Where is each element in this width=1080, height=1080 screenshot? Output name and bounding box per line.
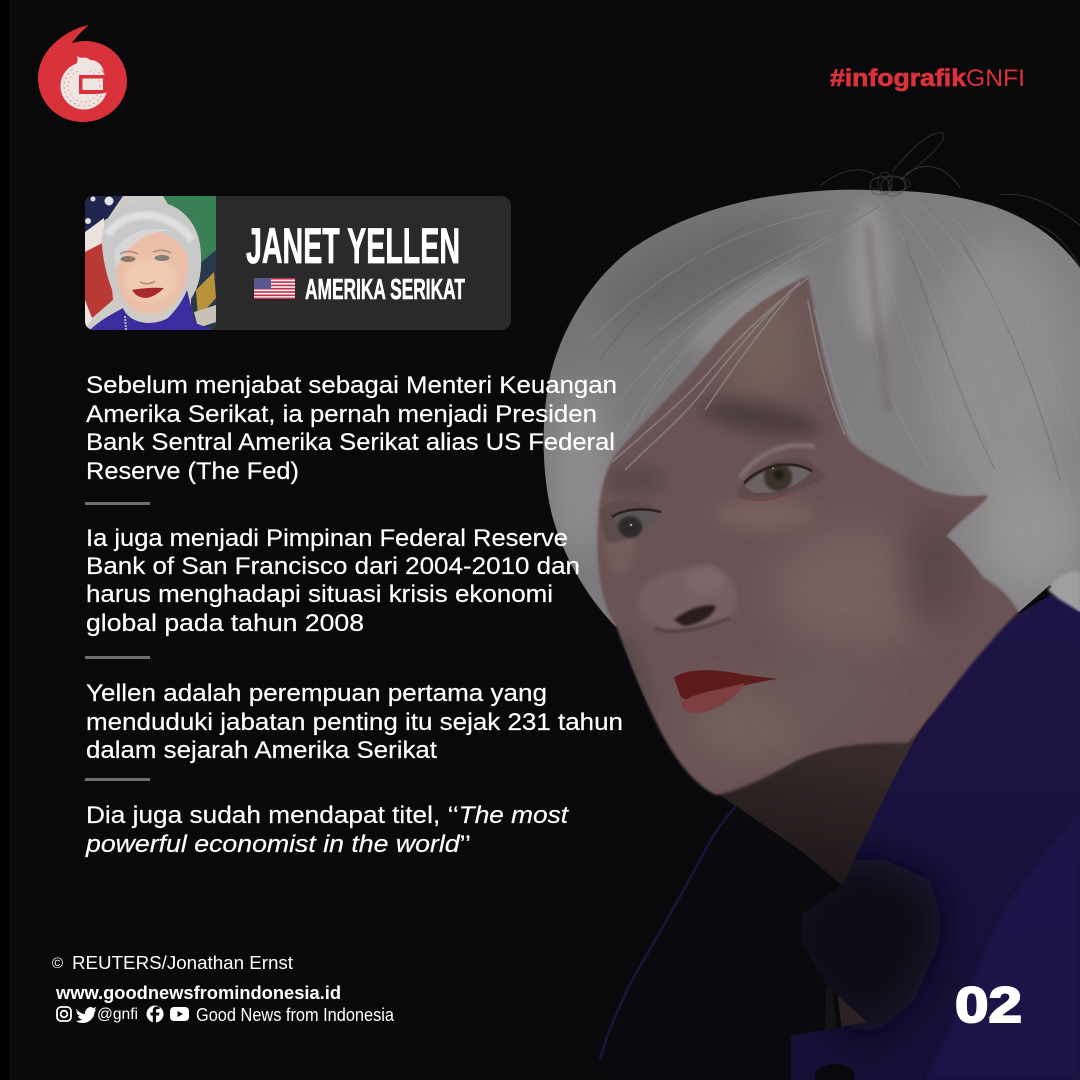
jacket collar — [780, 590, 1080, 1080]
emblem eagle head — [68, 56, 104, 72]
handle: @gnfi — [97, 1006, 138, 1023]
text block 2: Ia juga menjadi Pimpinan Federal Reserve — [86, 525, 568, 552]
lips — [674, 670, 778, 713]
face — [116, 231, 188, 314]
name: JANET YELLEN — [246, 218, 460, 274]
text block 1: Sebelum menjabat sebagai Menteri Keuangan — [86, 372, 617, 399]
hashtag: #infografik — [830, 65, 967, 92]
portrait photo of Janet Yellen — [544, 133, 1080, 1080]
eye: right — [738, 445, 826, 500]
hair mass — [544, 190, 1080, 626]
icon: youtube — [170, 1007, 189, 1021]
icon: US flag — [254, 278, 295, 299]
flyaway hair strands — [820, 133, 1080, 268]
hashtag — [830, 65, 1025, 92]
text block 2: harus menghadapi situasi krisis ekonomi — [86, 581, 553, 608]
photo credit: REUTERS/Jonathan Ernst — [72, 953, 293, 973]
emblem texture — [64, 66, 104, 106]
jacket — [90, 290, 214, 330]
profile card — [85, 196, 511, 330]
text block 1: Amerika Serikat, ia pernah menjadi Presiden — [86, 401, 597, 428]
channel name: Good News from Indonesia — [196, 1005, 395, 1025]
neck — [712, 660, 975, 886]
logo: GNFI swirl emblem — [38, 25, 127, 122]
text block 1: Bank Sentral Amerika Serikat alias US Federal — [86, 429, 615, 456]
social icons and handles — [57, 1005, 395, 1025]
website: www.goodnewsfromindonesia.id — [55, 982, 341, 1003]
country: AMERIKA SERIKAT — [305, 274, 465, 306]
text block 3 — [86, 680, 623, 764]
text block 1 — [86, 372, 617, 485]
text block 3: dalam sejarah Amerika Serikat — [86, 737, 437, 764]
nose — [638, 566, 737, 631]
background left strip — [0, 0, 9, 1080]
hair — [102, 201, 201, 300]
text block 3: Yellen adalah perempuan pertama yang — [86, 680, 547, 707]
card portrait photo — [85, 196, 216, 330]
hair tuft at right — [1048, 571, 1080, 612]
text block 2 — [86, 525, 580, 637]
text block 4 — [85, 802, 569, 858]
text block 4: Dia juga sudah mendapat titel, ‘‘ The most — [86, 802, 569, 829]
photo credit: © — [52, 955, 63, 972]
icon: twitter — [76, 1007, 96, 1023]
text block 2: global pada tahun 2008 — [86, 610, 364, 637]
icon: facebook — [146, 1006, 164, 1023]
icon: instagram — [57, 1007, 71, 1021]
outer shoulder of jacket — [600, 806, 860, 1080]
text block 4: powerful economist in the world ’’ — [85, 831, 471, 858]
hashtag: GNFI — [966, 65, 1025, 92]
text block 3: menduduki jabatan penting itu sejak 231 tahun — [86, 709, 623, 736]
page number: 02 — [955, 977, 1022, 1033]
face — [598, 276, 1019, 795]
emblem ring — [60, 62, 108, 110]
fringe strands overlapping forehead — [612, 278, 855, 470]
eye: left — [600, 501, 661, 542]
text block 1: Reserve (The Fed) — [86, 458, 299, 485]
text block 2: Bank of San Francisco dari 2004-2010 dan — [86, 553, 580, 580]
emblem G bar — [79, 75, 108, 94]
